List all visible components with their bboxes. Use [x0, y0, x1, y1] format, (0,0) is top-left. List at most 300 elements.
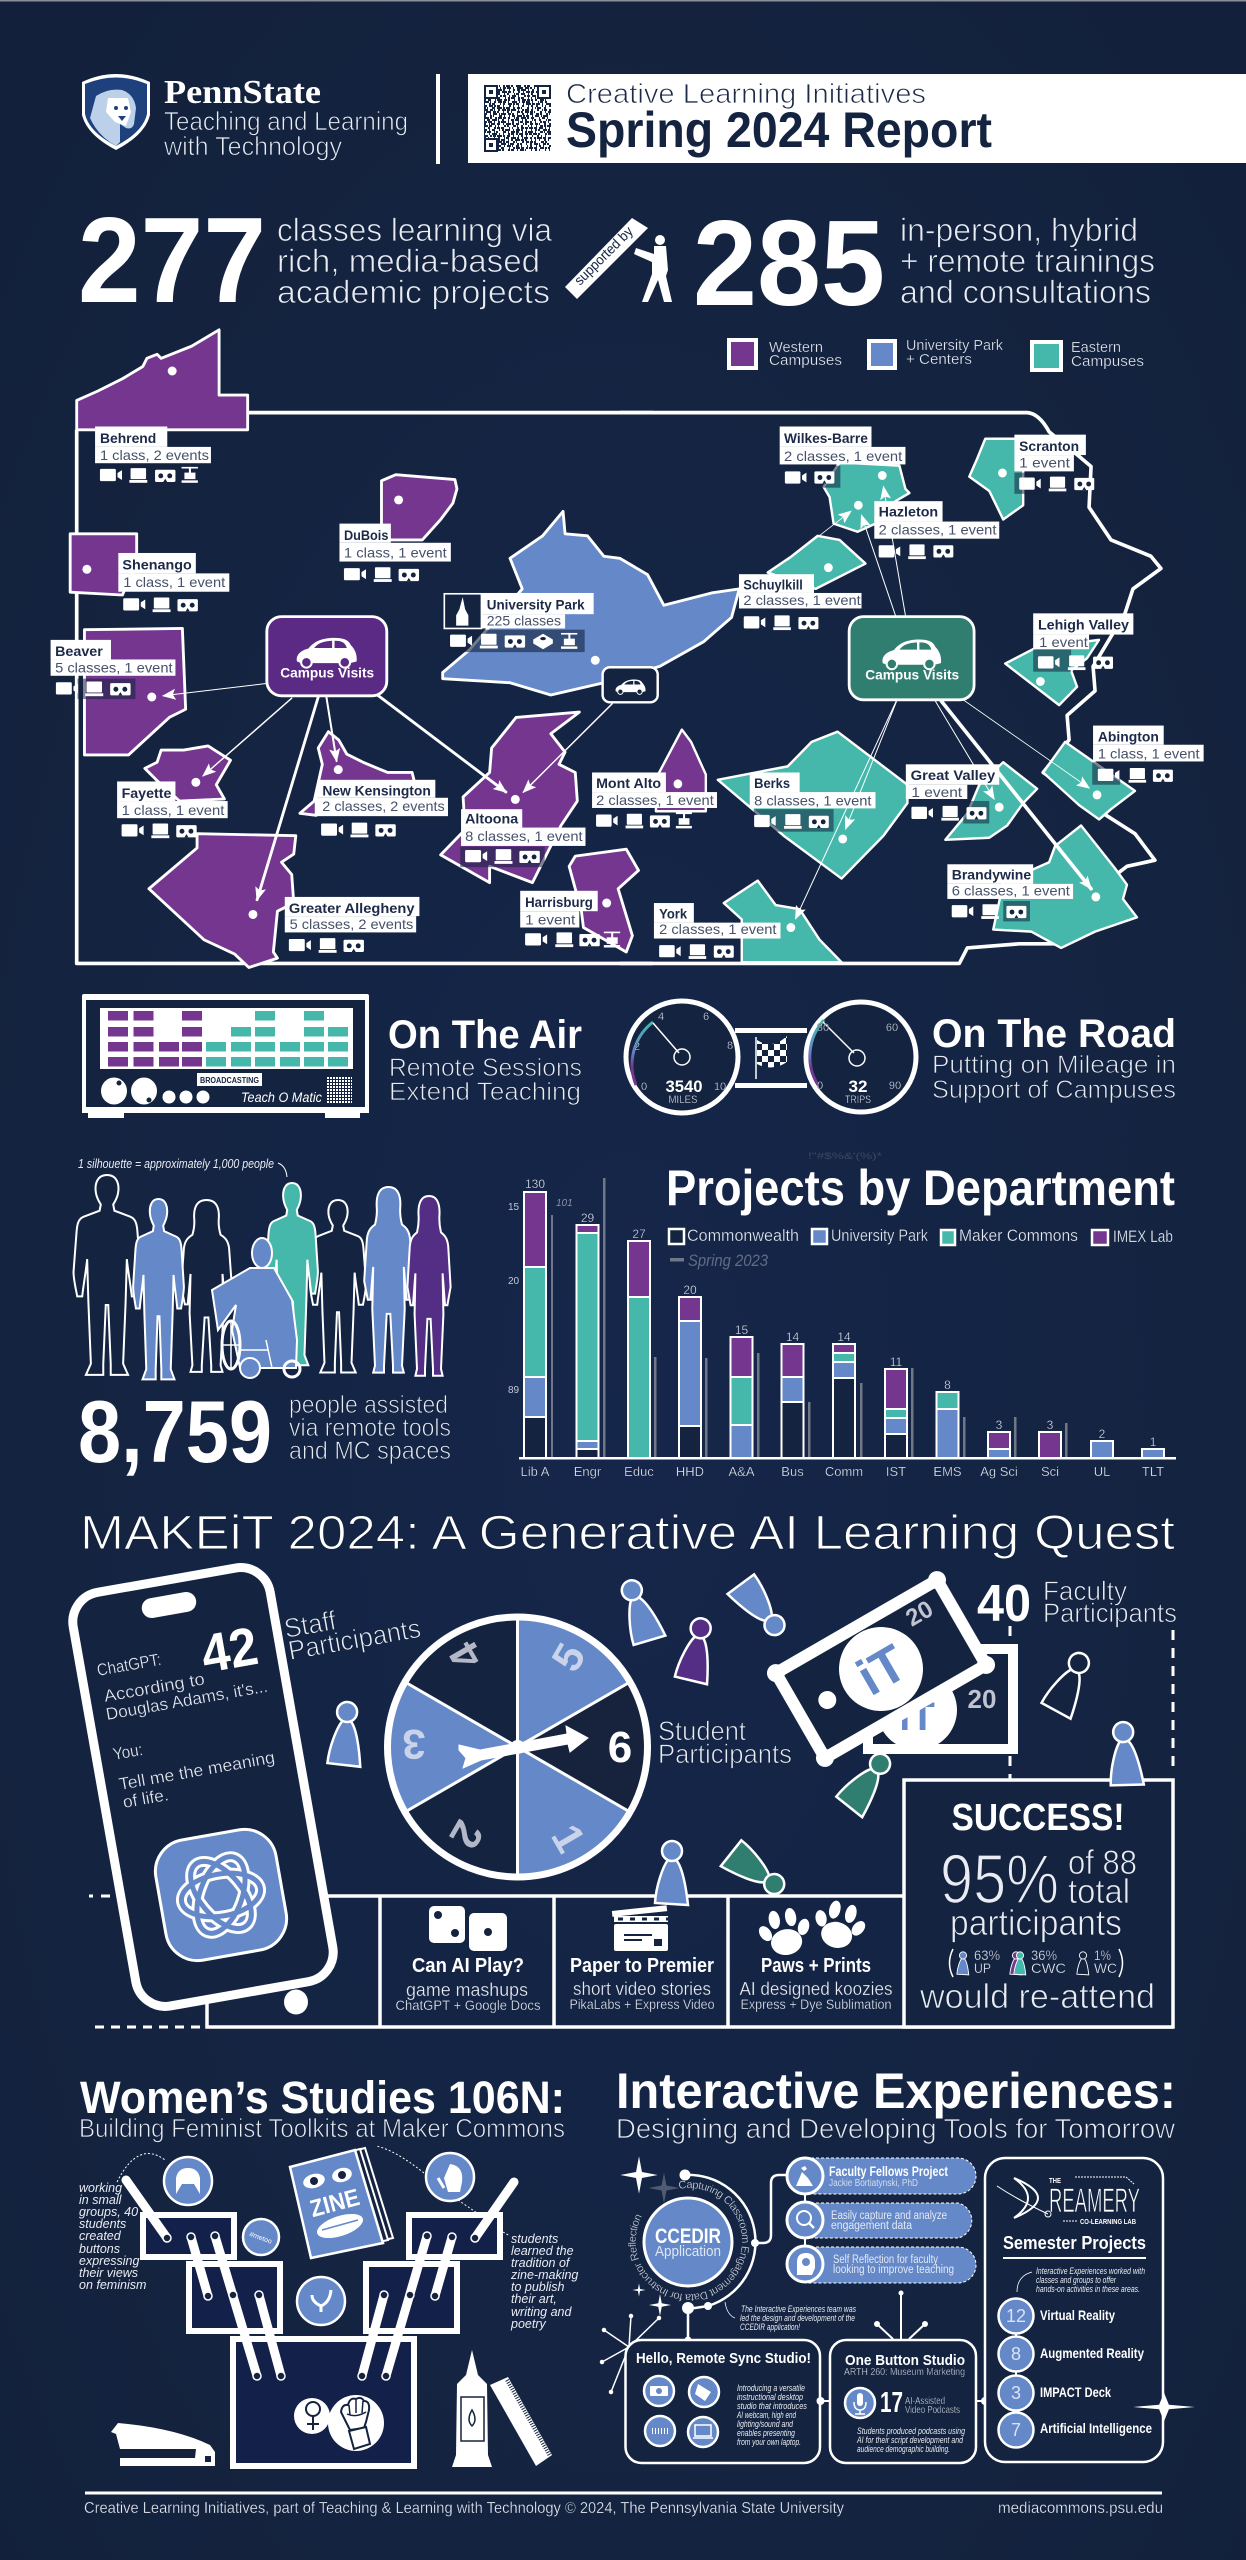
label: Altoona: 8 classes, 1 event [465, 828, 583, 844]
panel: Dreamery semester projects: Semester Projects [1003, 2233, 1146, 2253]
category labels: Engr [574, 1464, 602, 1479]
panel: One Button Studio: Students produced podcasts using [857, 2426, 965, 2436]
label: Berks [750, 772, 875, 832]
label: York: 2 classes, 1 event [659, 922, 777, 937]
map legend: Western [769, 339, 823, 356]
header: Penn State logo [82, 74, 408, 161]
arrows from western campus visits [163, 684, 612, 900]
chart legend: departments: Maker Commons [959, 1226, 1078, 1245]
icon: zine: ZINE [307, 2184, 363, 2223]
panel: SUCCESS: would re-attend [919, 1978, 1155, 2016]
icon: zine [290, 2148, 393, 2258]
icon: protest buttons: #metoo [248, 2231, 273, 2246]
bar chart: projects by department [508, 1177, 1176, 1479]
gauge: miles: 3540 [666, 1077, 702, 1096]
map legend: Campuses [1071, 353, 1144, 370]
icon: microphone [845, 2388, 875, 2418]
label: Abington [1092, 726, 1204, 785]
note: zine tradition: their art, [511, 2292, 557, 2306]
category labels: Bus [781, 1464, 804, 1479]
wheel numbers: 5 [542, 1635, 595, 1679]
heading: Interactive Experiences [616, 2063, 1176, 2144]
chart legend: departments: Spring 2023 [688, 1251, 768, 1270]
panel: One Button Studio: audience demographic building. [857, 2444, 950, 2454]
label: Schuylkill: Schuylkill [743, 578, 803, 593]
panel: Dreamery semester projects [985, 2158, 1163, 2462]
panel: Can AI Play?: ChatGPT + Google Docs [396, 1997, 540, 2013]
panel: Dreamery semester projects: hands-on activities in these areas. [1036, 2284, 1140, 2294]
chat text: of life. [121, 1785, 170, 1812]
bar totals [525, 1177, 1157, 1449]
panel: On The Air radio device [82, 994, 369, 1118]
panel: On The Air radio device: Teach O Matic [241, 1089, 322, 1105]
icon: ruler [490, 2377, 552, 2466]
panel: Hello, Remote Sync Studio: AI webcam, high end [736, 2410, 797, 2420]
panel: Hello, Remote Sync Studio: from your own laptop. [737, 2437, 801, 2447]
label: Shenango: Shenango [122, 556, 192, 572]
footer: Creative Learning Initiatives, part of Teaching & Learning with Technology © 2024, The Pennsylvania State University [84, 2500, 844, 2517]
big sparkle over Dreamery panel [1133, 2392, 1195, 2422]
icon: protest buttons [164, 2153, 474, 2325]
logo: The Dreamery co-learning lab [997, 2177, 1140, 2226]
panel: Paws + Prints: Express + Dye Sublimation [740, 1996, 892, 2012]
callout: western campus visits [267, 617, 387, 696]
panel: Paws + Prints: Paws + Prints [761, 1955, 871, 1977]
participant breakdown: 63% [974, 1947, 1000, 1963]
label: Mont Alto: 2 classes, 1 event [596, 793, 714, 808]
project list: Virtual Reality [1040, 2307, 1115, 2323]
label: Brandywine [947, 864, 1073, 921]
panel: CCEDIR application: Application [655, 2243, 721, 2260]
label: Beaver: Beaver [55, 643, 103, 659]
panel: One Button Studio: ARTH 260: Museum Marketing [844, 2367, 965, 2378]
panel: Hello, Remote Sync Studio: Hello, Remote Sync Studio! [636, 2350, 811, 2367]
icon: person holding "supported by" sign [565, 218, 672, 302]
heading: Women's Studies 106N: Building Feminist Toolkits at Maker Commons [79, 2113, 565, 2143]
icon: MAKEiT money: iT [847, 1634, 917, 1707]
gauge: trips: 60 [886, 1022, 898, 1034]
bar totals: 3 [1047, 1418, 1054, 1432]
gauge: miles: 10 [714, 1081, 726, 1093]
panel: SUCCESS: of 88 [1068, 1844, 1137, 1882]
stat: 8,759 people: people assisted [289, 1391, 448, 1419]
label: Altoona [460, 809, 585, 867]
chart: spinner wheel student participants [388, 1617, 648, 1877]
panel: phone with ChatGPT [68, 1563, 338, 2011]
faint stray text: !"#$%&'(%)* [808, 1151, 883, 1161]
panel: workshop boxes frame [89, 1896, 1173, 2027]
label: Shenango: 1 class, 1 event [123, 574, 225, 590]
panel: CCEDIR features: engagement data [831, 2220, 913, 2232]
label: Great Valley: 1 event [911, 785, 962, 800]
chart: broadcast level meter [108, 1011, 348, 1066]
gauge: miles: 0 [641, 1081, 647, 1093]
note: silhouette scale [78, 1156, 287, 1177]
label: DuBois [339, 524, 451, 582]
footer: mediacommons.psu.edu [998, 2500, 1163, 2517]
heading: On The Road [932, 1012, 1176, 1104]
label: Harrisburg: 1 event [525, 911, 575, 927]
panel: One Button Studio: AI-Assisted [905, 2396, 945, 2407]
category labels: Ag Sci [980, 1464, 1018, 1479]
chat text: You: [111, 1740, 144, 1764]
footer [84, 2492, 1163, 2517]
heading: On The Air: Extend Teaching [389, 1078, 581, 1106]
note: working in small groups: on feminism [79, 2278, 146, 2292]
header: Penn State logo: Teaching and Learning [164, 106, 408, 136]
callout: eastern campus visits: Campus Visits [865, 667, 959, 682]
note: CCEDIR team: led the design and development of the [740, 2313, 855, 2324]
stat: 40 faculty: Participants [1043, 1598, 1177, 1628]
stat: 40 faculty: 40 [977, 1575, 1031, 1633]
label: Schuylkill [739, 574, 862, 630]
stat: 40 faculty [977, 1575, 1177, 1633]
starburst rays [600, 2314, 660, 2394]
heading: Projects by Department: Projects by Department [666, 1160, 1175, 1216]
header: Penn State logo: with Technology [163, 131, 342, 161]
note: working in small groups: their views [79, 2266, 138, 2280]
note: working in small groups: buttons [79, 2242, 120, 2256]
bar totals: 20 [683, 1283, 697, 1297]
icon: ChatGPT logo [150, 1824, 292, 1966]
label: New Kensington: New Kensington [322, 783, 431, 799]
panel: Can AI Play?: game mashups [406, 1980, 528, 2000]
icon: phone home button [284, 1990, 308, 2014]
panel: Hello, Remote Sync Studio: instructional desktop [737, 2392, 803, 2402]
stat: 277 classes: rich, media-based [277, 243, 540, 279]
spring 2023 comparison lines [551, 1178, 1068, 1458]
category labels: Lib A [521, 1464, 550, 1479]
stat: 40 faculty: Faculty [1043, 1576, 1127, 1606]
icon: phone camera pill [140, 1590, 198, 1620]
panel: SUCCESS [904, 1780, 1173, 2027]
label: Lehigh Valley: 1 event [1039, 635, 1088, 650]
annotations on first bar: 101 [556, 1198, 573, 1209]
note: CCEDIR team: The Interactive Experiences team was [741, 2304, 856, 2315]
annotations on first bar: 20 [508, 1276, 520, 1287]
label: Staff Participants: Staff [282, 1605, 339, 1644]
label: York [654, 903, 780, 959]
icon: MAKEiT money: 20 [901, 1595, 938, 1632]
note: zine tradition [510, 2232, 578, 2331]
bar totals: 29 [581, 1211, 594, 1225]
campus location dots west [82, 367, 611, 919]
project list: 3 [1011, 2383, 1021, 2403]
stat: 8,759 people: via remote tools [289, 1414, 451, 1442]
panel: One Button Studio: 17 [880, 2387, 903, 2419]
label: New Kensington [317, 780, 448, 837]
header: Penn State logo: PennState [164, 74, 321, 111]
heading: On The Road: On The Road [932, 1012, 1176, 1056]
state outline west [77, 413, 653, 963]
project list: 12 [1006, 2306, 1026, 2326]
chart legend: departments [669, 1226, 1173, 1270]
header divider [436, 74, 440, 164]
chat text: According to [102, 1670, 206, 1706]
gauge: miles: MILES [668, 1094, 698, 1106]
label: Greater Allegheny: 5 classes, 2 events [290, 916, 413, 932]
heading: On The Road: Support of Campuses [932, 1076, 1176, 1104]
bar totals: 2 [1099, 1427, 1106, 1441]
category labels: TLT [1142, 1464, 1164, 1479]
annotations on first bar: 15 [508, 1202, 520, 1213]
label: Student Participants: Participants [658, 1739, 792, 1769]
note: working in small groups: students [79, 2217, 126, 2231]
wheel numbers [402, 1633, 595, 1860]
category labels: IST [886, 1464, 906, 1479]
panel: CCEDIR features: Jackie Bortiatynski, PhD [829, 2178, 918, 2189]
label: Greater Allegheny [285, 897, 419, 953]
panel: CCEDIR features: looking to improve teaching [833, 2264, 954, 2276]
label: Harrisburg: Harrisburg [525, 894, 593, 910]
stat: 42 staff: 42 [197, 1616, 262, 1685]
arrows from eastern campus visits [788, 487, 1091, 919]
label: Scranton: Scranton [1019, 439, 1079, 454]
panel: Can AI Play?: Can AI Play? [412, 1955, 524, 1977]
category labels [521, 1464, 1164, 1479]
gauge: trips: 0 [817, 1080, 823, 1092]
gauge: trips [806, 1002, 916, 1112]
campus shapes west [70, 330, 739, 968]
icon: venus and raised fist [294, 2395, 384, 2451]
panel: dashboard gauges [626, 1001, 916, 1113]
header: title banner: Creative Learning Initiatives [566, 78, 926, 109]
callout: eastern campus visits [849, 617, 974, 700]
panel: Paws + Prints [740, 1896, 892, 2012]
bar totals: 14 [786, 1330, 799, 1344]
note: working in small groups: expressing [79, 2254, 139, 2268]
panel: Paper to Premier [570, 1905, 715, 2012]
panel: CCEDIR application: Capturing Classroom Engagement Data for Instructor Reflection [628, 2180, 750, 2302]
gauge: miles: 6 [703, 1011, 709, 1023]
wheel numbers: 3 [402, 1721, 426, 1768]
label: Great Valley [906, 764, 999, 823]
panel: CCEDIR features: Faculty Fellows Project [829, 2164, 948, 2179]
project list: Augmented Reality [1040, 2345, 1144, 2361]
map legend: Eastern [1071, 339, 1121, 356]
gauge: trips: TRIPS [845, 1094, 871, 1106]
icon: radio knobs [100, 1077, 210, 1105]
label: Behrend: Behrend [100, 430, 156, 446]
label: Hazleton: Hazleton [879, 505, 938, 520]
panel: Paws + Prints: AI designed koozies [740, 1979, 892, 1999]
participant breakdown: 1% [1094, 1947, 1111, 1963]
participant breakdown: WC [1094, 1960, 1117, 1976]
panel: One Button Studio: One Button Studio [845, 2352, 965, 2369]
stat: 277 classes: academic projects [277, 274, 550, 310]
category labels: Educ [624, 1464, 654, 1479]
pawn on success box [1105, 1721, 1144, 1787]
panel: One Button Studio: Video Podcasts [905, 2405, 960, 2416]
stat: 277 classes: 277 [78, 192, 266, 328]
label: Lehigh Valley: Lehigh Valley [1038, 618, 1129, 633]
stat: 8,759 people: and MC spaces [289, 1437, 451, 1465]
panel: SUCCESS: participants [950, 1902, 1122, 1943]
label: Lehigh Valley [1033, 613, 1133, 672]
sparkle stars [620, 2156, 671, 2316]
map: western half [51, 330, 739, 968]
icon: MAKEiT money: iT [899, 1695, 935, 1739]
gauge: trips: 30 [817, 1022, 829, 1034]
gauge: trips: 32 [848, 1077, 868, 1096]
dashed faculty guides [1010, 1626, 1173, 1780]
gauge: miles: 2 [634, 1041, 640, 1053]
stat: 285 trainings: in-person, hybrid [900, 212, 1138, 248]
stat: 285 trainings: and consultations [900, 274, 1151, 310]
label: Altoona: Altoona [465, 810, 518, 826]
bar totals: 130 [525, 1177, 545, 1191]
project list: 7 [1011, 2420, 1021, 2440]
note: CCEDIR team: CCEDIR application! [740, 2322, 800, 2333]
category labels: Comm [825, 1464, 863, 1479]
label: University Park [444, 593, 594, 652]
stat: 285 trainings [693, 195, 1155, 331]
panel: Paper to Premier: short video stories [573, 1979, 711, 1999]
panel: CCEDIR application [628, 2170, 786, 2339]
panel: CCEDIR features: Self Reflection for faculty [833, 2254, 938, 2266]
label: Harrisburg [520, 891, 620, 948]
toolkit straps [126, 2180, 514, 2376]
note: working in small groups [79, 2181, 146, 2292]
label: Brandywine: 6 classes, 1 event [952, 884, 1070, 899]
project list: Artificial Intelligence [1040, 2420, 1152, 2436]
map of Pennsylvania campuses [51, 330, 1204, 968]
label: Wilkes-Barre [780, 426, 905, 488]
campus shapes east [656, 439, 1137, 962]
panel: CCEDIR application: CCEDIR [655, 2225, 721, 2248]
icon: person holding "supported by" sign: supported by [571, 223, 636, 288]
panel: One Button Studio: AI for their script development and [856, 2435, 964, 2445]
label: Schuylkill: 2 classes, 1 event [743, 593, 861, 608]
label: Wilkes-Barre: 2 classes, 1 event [784, 449, 902, 464]
chat text: ChatGPT: [95, 1650, 163, 1680]
icon: studio gear circles [644, 2376, 719, 2447]
icon: MAKEiT money [764, 1568, 1013, 1770]
category labels: Sci [1041, 1464, 1059, 1479]
label: Abington: 1 class, 1 event [1098, 746, 1200, 762]
callout: western campus visits: Campus Visits [280, 665, 374, 680]
label: Berks: 8 classes, 1 event [754, 793, 872, 809]
map legend [729, 337, 1144, 370]
wheel numbers: 2 [440, 1813, 493, 1857]
logo: The Dreamery co-learning lab: REAMERY [1049, 2182, 1140, 2220]
stat: 8,759 people [78, 1382, 451, 1481]
panel: Dreamery semester projects: classes and groups to offer [1036, 2275, 1117, 2285]
label: Fayette: 1 class, 1 event [122, 802, 225, 818]
annotations on first bar: 89 [508, 1385, 520, 1396]
panel: Dreamery semester projects: Interactive Experiences worked with [1036, 2266, 1145, 2276]
label: Mont Alto: Mont Alto [596, 776, 661, 791]
note: zine tradition: tradition of [511, 2256, 571, 2270]
participant breakdown: UP [974, 1960, 991, 1976]
panel: On The Air radio device: BROADCASTING [200, 1076, 259, 1085]
icon: Nittany Lion shield [82, 74, 150, 150]
label: Brandywine: Brandywine [952, 867, 1032, 882]
note: working in small groups: in small [79, 2193, 123, 2207]
logo: The Dreamery co-learning lab: CO-LEARNING LAB [1080, 2219, 1136, 2226]
panel: Hello, Remote Sync Studio: Introducing a versatile [737, 2383, 805, 2393]
icon: checkered flag [756, 1036, 787, 1079]
panel: Hello, Remote Sync Studio [626, 2340, 820, 2463]
panel: CCEDIR features: Easily capture and analyze [831, 2210, 947, 2222]
game pawns [327, 1573, 1098, 1905]
note: zine tradition: poetry [510, 2317, 546, 2331]
logo: The Dreamery co-learning lab: THE [1049, 2178, 1061, 2185]
label: Scranton: 1 event [1019, 456, 1070, 471]
label: Hazleton: 2 classes, 1 event [879, 522, 997, 538]
label: Greater Allegheny: Greater Allegheny [289, 900, 415, 916]
map: eastern half [592, 413, 1204, 963]
label: Student Participants [658, 1716, 792, 1769]
icon: spinner arrow [459, 1726, 588, 1768]
note: working in small groups: created [79, 2229, 122, 2243]
label: Great Valley: Great Valley [911, 768, 996, 783]
heading: On The Road: Putting on Mileage in [932, 1051, 1176, 1079]
chat text: Douglas Adams, it's... [104, 1677, 269, 1724]
bar totals: 3 [996, 1418, 1003, 1432]
category labels: A&A [728, 1464, 755, 1479]
stat: 8,759 people: 8,759 [78, 1382, 272, 1481]
participant breakdown: CWC [1031, 1960, 1066, 1976]
panel: Can AI Play? [396, 1906, 540, 2013]
note: zine tradition: students [511, 2232, 558, 2246]
note: working in small groups: groups, 40 [79, 2205, 138, 2219]
icon: paw prints [753, 1896, 872, 1960]
category labels: HHD [676, 1464, 704, 1479]
label: York: York [659, 906, 687, 922]
annotations on first bar [508, 1198, 573, 1396]
note: working in small groups: working [79, 2181, 122, 2195]
panel: Paper to Premier: PikaLabs + Express Video [570, 1996, 715, 2012]
icon: dice [429, 1906, 507, 1951]
gauge: miles [626, 1001, 738, 1113]
bar totals: 8 [944, 1378, 951, 1392]
note: zine tradition: learned the [511, 2244, 574, 2258]
header: title banner [468, 74, 1246, 163]
icon: MAKEiT money: 20 [968, 1684, 996, 1714]
label: Berks: Berks [754, 776, 790, 791]
panel: Hello, Remote Sync Studio: studio that introduces [737, 2401, 807, 2411]
gauge: miles: 8 [727, 1040, 733, 1052]
note: zine tradition: zine-making [510, 2268, 578, 2282]
label: DuBois: DuBois [344, 527, 389, 543]
antenna [875, 2292, 927, 2340]
label: Student Participants: Student [658, 1716, 746, 1746]
stat: 285 trainings: + remote trainings [900, 243, 1155, 279]
icon: glue bottle [452, 2350, 492, 2467]
map legend: Campuses [769, 352, 842, 369]
label: Abington: Abington [1098, 729, 1159, 745]
wheel numbers: 1 [542, 1816, 595, 1860]
chart legend: departments: IMEX Lab [1113, 1227, 1173, 1246]
heading: Interactive Experiences: Interactive Experiences: [616, 2063, 1176, 2119]
map legend: + Centers [906, 351, 972, 368]
icon: feature circles [787, 2158, 823, 2282]
label: Beaver [51, 640, 175, 699]
chart: people silhouettes [74, 1175, 451, 1379]
label: Behrend [95, 426, 211, 483]
bar totals: 15 [735, 1323, 748, 1337]
heading: Women's Studies 106N: Women’s Studies 106N: [80, 2072, 565, 2123]
panel: SUCCESS: 95% [940, 1840, 1059, 1918]
chat text: Tell me the meaning [117, 1748, 276, 1794]
heading: Interactive Experiences: Designing and Developing Tools for Tomorrow [616, 2113, 1176, 2144]
label: Hazleton [874, 501, 999, 559]
campus location dots east [673, 469, 1101, 932]
map legend: University Park [906, 337, 1003, 354]
panel: CCEDIR features [787, 2158, 976, 2283]
stat: 277 classes: classes learning via [277, 212, 552, 248]
